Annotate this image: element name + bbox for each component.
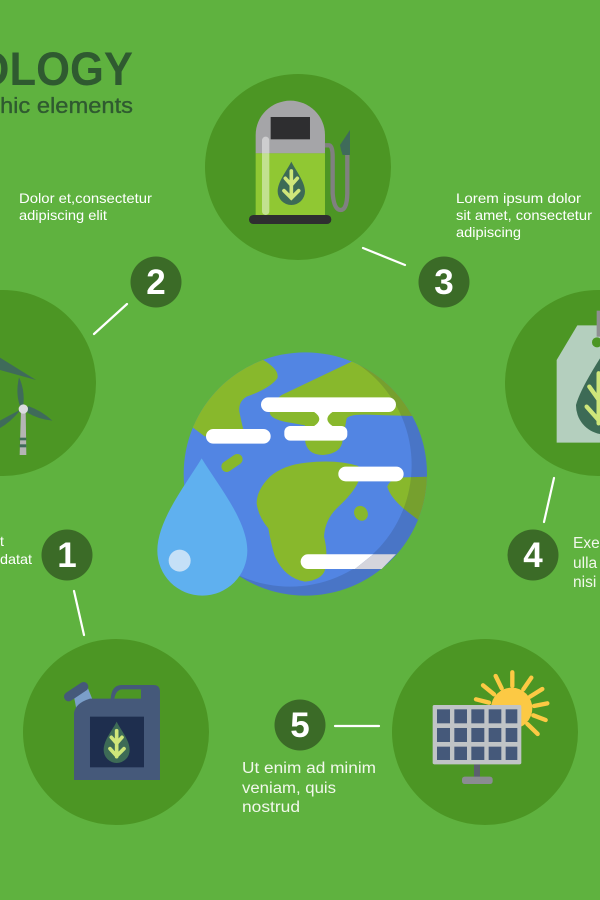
panel: canister bbox=[23, 639, 209, 825]
title bbox=[0, 42, 133, 118]
text block 2: Dolor et,consectetur bbox=[19, 190, 152, 206]
number badge 5 bbox=[274, 700, 326, 750]
clouds bbox=[206, 397, 404, 569]
icon: fuel pump bbox=[249, 101, 350, 224]
icon: fuel canister bbox=[69, 685, 160, 780]
number badge 5: 5 bbox=[290, 706, 310, 745]
text block 1 bbox=[0, 533, 32, 567]
text block 5: veniam, quis bbox=[242, 780, 336, 797]
text block 1: t bbox=[0, 533, 4, 549]
number badge 2: 2 bbox=[146, 263, 166, 302]
icon: solar panel and sun bbox=[433, 672, 547, 784]
icon: wind turbines bbox=[0, 358, 52, 455]
globe and water drop bbox=[157, 352, 427, 596]
text block 4: nisi bbox=[573, 574, 596, 591]
text block 4 bbox=[573, 535, 600, 591]
panel: solar energy bbox=[392, 639, 578, 825]
number badge 3 bbox=[418, 256, 470, 308]
text block 3: Lorem ipsum dolor bbox=[456, 190, 581, 206]
text block 2: adipiscing elit bbox=[19, 207, 107, 223]
text block 3: sit amet, consectetur bbox=[456, 207, 592, 223]
panel: wind energy bbox=[0, 290, 96, 476]
number badge 4 bbox=[508, 530, 558, 580]
text block 4: Exe bbox=[573, 535, 600, 552]
text block 2 bbox=[19, 190, 152, 223]
number badge 2 bbox=[130, 256, 182, 308]
panel: bottle bbox=[505, 290, 600, 476]
icon: bottle with leaf drop bbox=[557, 311, 600, 443]
number badge 1: 1 bbox=[57, 536, 77, 575]
text block 5 bbox=[242, 760, 376, 816]
text block 5: Ut enim ad minim bbox=[242, 760, 376, 777]
text block 3 bbox=[456, 190, 592, 240]
text block 4: ulla bbox=[573, 555, 598, 572]
text block 5: nostrud bbox=[242, 799, 300, 816]
number badge 1 bbox=[42, 530, 92, 580]
water drop bbox=[157, 458, 247, 596]
text block 1: datat bbox=[0, 551, 32, 567]
number badge 4: 4 bbox=[523, 536, 543, 575]
text block 3: adipiscing bbox=[456, 224, 521, 240]
number badge 3: 3 bbox=[434, 263, 454, 302]
panel: fuel pump bbox=[205, 74, 391, 260]
connector lines bbox=[74, 248, 554, 726]
